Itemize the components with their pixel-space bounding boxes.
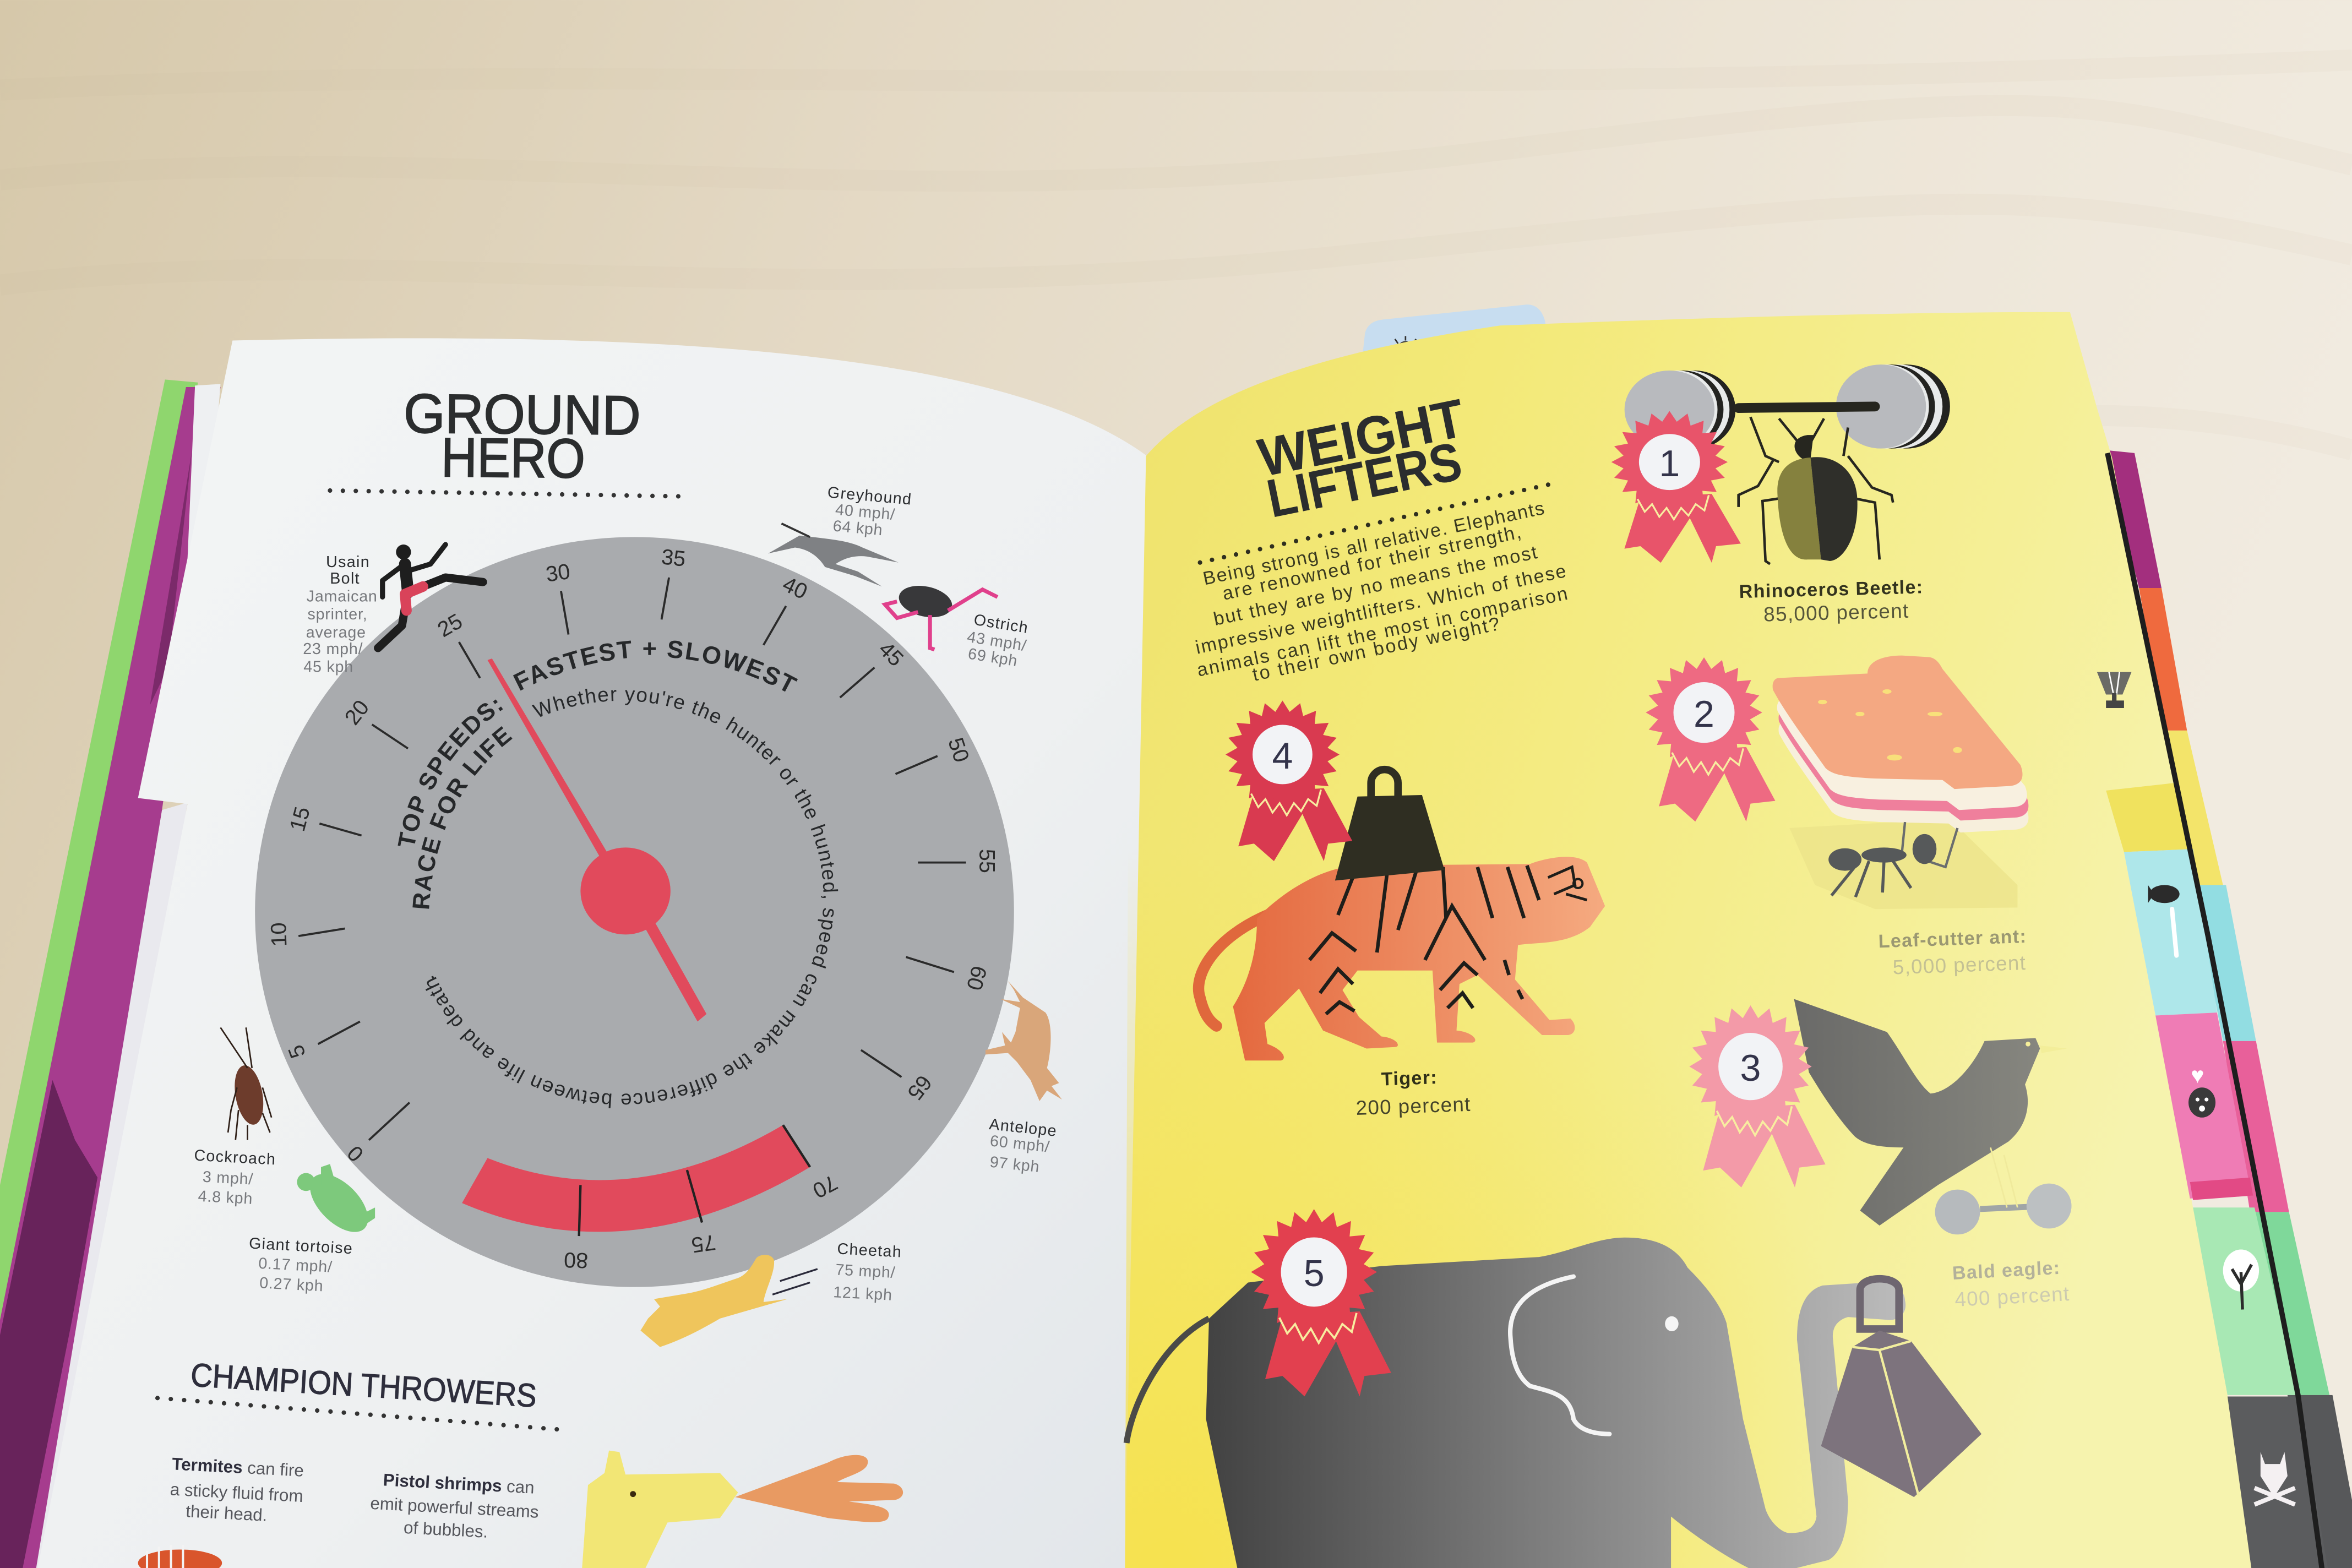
icon: cockroach [220,1027,271,1140]
intro text: to their own body weight? [1251,613,1501,685]
scale numbers: 75 [690,1230,717,1257]
icon: trophy [2097,672,2132,708]
scale numbers: 20 [340,695,374,729]
icon: beetle lifting barbell [1625,364,1950,564]
rosette 2: 2 [1694,693,1714,735]
caption: leaf-cutter ant [1878,926,2028,979]
heading: ground hero [404,383,641,490]
right page tabs and stack edges [1362,304,2352,1568]
curved intro text: Whether you're the hunter or the hunted, speed can make the difference between life and death. [425,688,838,1108]
label: ostrich: 43 mph/ [966,628,1028,655]
caption: leaf-cutter ant: 5,000 percent [1892,951,2027,978]
tab: danger [2228,1397,2328,1568]
tab: food [2124,849,2217,1016]
scale numbers: 45 [874,637,908,671]
black binding line [2108,453,2322,1568]
scale numbers [266,545,999,1272]
gauge dial [255,537,1014,1287]
icon: greyhound [768,524,899,586]
scale numbers: 55 [975,849,999,873]
label: usain bolt: 23 mph/ [303,640,363,658]
left page [53,338,1146,1568]
tab: love: ♥ [2191,1063,2204,1088]
tabs on the right page edge [2106,783,2328,1568]
intro text: impressive weightlifters. Which of these [1194,560,1568,658]
scale numbers: 65 [902,1070,937,1104]
label: usain bolt: average [306,624,366,641]
tab: love [2155,1012,2253,1200]
icon: bald eagle with barbell [1794,999,2072,1234]
heading: weight lifters: WEIGHT [1253,387,1469,488]
label: greyhound [824,483,913,541]
icon: ostrich [885,581,998,650]
label: cockroach: 3 mph/ [202,1168,254,1188]
label: greyhound: Greyhound [827,483,913,509]
curved heading: top speeds: FASTEST + SLOWEST [513,641,798,692]
heading: champion throwers: CHAMPION THROWERS [189,1356,538,1414]
label: cockroach: 4.8 kph [198,1188,253,1208]
label: usain bolt: Usain [326,553,370,571]
curved heading: top speeds: TOP SPEEDS: [398,699,503,846]
label: ostrich: Ostrich [973,611,1030,637]
scale numbers: 25 [433,609,466,642]
label: greyhound: 40 mph/ [835,501,896,524]
scale numbers: 0 [342,1141,368,1167]
ticks [298,578,966,1140]
scale numbers: 60 [962,963,992,993]
text: pistol shrimps: Pistol shrimps can [383,1470,535,1498]
scale numbers: 5 [284,1042,311,1061]
label: giant tortoise: 0.27 kph [259,1274,324,1295]
rosette 5: 5 [1304,1253,1325,1294]
text: termites: Termites can fire [172,1454,304,1480]
label: cheetah [833,1240,902,1304]
text: termites: their head. [186,1501,268,1525]
label: usain bolt [303,553,378,676]
caption: rhinoceros beetle: Rhinoceros Beetle: [1739,576,1924,602]
label: cheetah: Cheetah [837,1240,902,1261]
label: giant tortoise: Giant tortoise [248,1234,353,1257]
caption: bald eagle: 400 percent [1954,1282,2070,1311]
heading: weight lifters [1253,387,1469,529]
caption: tiger: Tiger: [1381,1067,1438,1090]
scale numbers: 50 [943,735,974,765]
scale numbers: 80 [563,1248,589,1272]
caption: bald eagle [1952,1257,2070,1311]
icon: spitting animal [582,1451,903,1568]
icon: usain bolt runner [378,545,483,648]
rosette 3: 3 [1740,1047,1761,1089]
right page [1125,312,2328,1568]
label: antelope [984,1115,1058,1178]
curved heading: top speeds: RACE FOR LIFE [412,726,513,909]
scale numbers: 15 [285,804,315,834]
caption: tiger: 200 percent [1355,1093,1471,1119]
label: cheetah: 75 mph/ [835,1261,896,1282]
label: cheetah: 121 kph [833,1283,893,1304]
label: usain bolt: Jamaican [307,588,378,606]
intro text: Being strong is all relative. Elephants [1201,498,1546,589]
label: giant tortoise [247,1234,353,1297]
label: cockroach [192,1147,276,1209]
red speed band [462,1125,810,1236]
icon: termite [138,1545,222,1568]
rosette 5 [1251,1209,1391,1396]
rosette 4: 4 [1272,735,1293,777]
curved heading: top speeds [398,641,798,909]
label: ostrich [963,611,1031,671]
caption: rhinoceros beetle: 85,000 percent [1763,600,1909,626]
icon: elephant with weight [1126,1238,1981,1568]
icon: tiger with weight [1199,770,1605,1060]
rosette 4 [1226,700,1352,861]
text: termites [168,1454,305,1527]
intro text: animals can lift the most in comparison [1195,583,1570,681]
heading: ground hero: GROUND [404,383,641,447]
caption: tiger [1354,1066,1471,1119]
rosette 1: 1 [1659,443,1680,484]
label: antelope: Antelope [988,1115,1058,1140]
label: giant tortoise: 0.17 mph/ [258,1255,333,1276]
intro text: are renowned for their strength, [1221,521,1523,605]
scale numbers: 70 [809,1170,841,1203]
text: pistol shrimps: of bubbles. [403,1518,488,1542]
label: usain bolt: Bolt [330,570,360,587]
book cover and page stack, left side [0,379,220,1568]
icon: ant lifting toast [1773,656,2028,909]
tab: nature [2193,1207,2298,1395]
scale numbers: 40 [779,572,811,604]
icon: tortoise [297,1164,378,1242]
caption: leaf-cutter ant: Leaf-cutter ant: [1878,926,2027,952]
caption: bald eagle: Bald eagle: [1952,1257,2061,1284]
label: antelope: 97 kph [989,1153,1041,1176]
rosette 2 [1646,657,1776,821]
icon: cheetah [640,1255,818,1347]
needle [487,658,706,1021]
icon: antelope [986,981,1062,1101]
label: antelope: 60 mph/ [989,1132,1050,1156]
scale numbers: 35 [660,545,687,571]
intro text [1194,498,1570,685]
text: pistol shrimps [368,1469,541,1544]
intro text: but they are by no means the most [1212,542,1539,630]
blue tab behind page [1362,304,1549,360]
label: usain bolt: sprinter, [307,606,368,623]
caption: rhinoceros beetle [1739,576,1924,627]
label: ostrich: 69 kph [967,645,1019,670]
label: greyhound: 64 kph [832,518,884,539]
text: pistol shrimps: emit powerful streams [370,1494,539,1522]
heading: ground hero: HERO [441,427,585,490]
label: cockroach: Cockroach [194,1147,276,1168]
label: usain bolt: 45 kph [303,658,353,676]
text: termites: a sticky fluid from [170,1479,303,1506]
rosette 3 [1689,1005,1826,1188]
scale numbers: 30 [545,559,571,587]
scale numbers: 10 [266,922,292,947]
heading: weight lifters: LIFTERS [1262,431,1467,529]
rosette 1 [1611,411,1741,563]
